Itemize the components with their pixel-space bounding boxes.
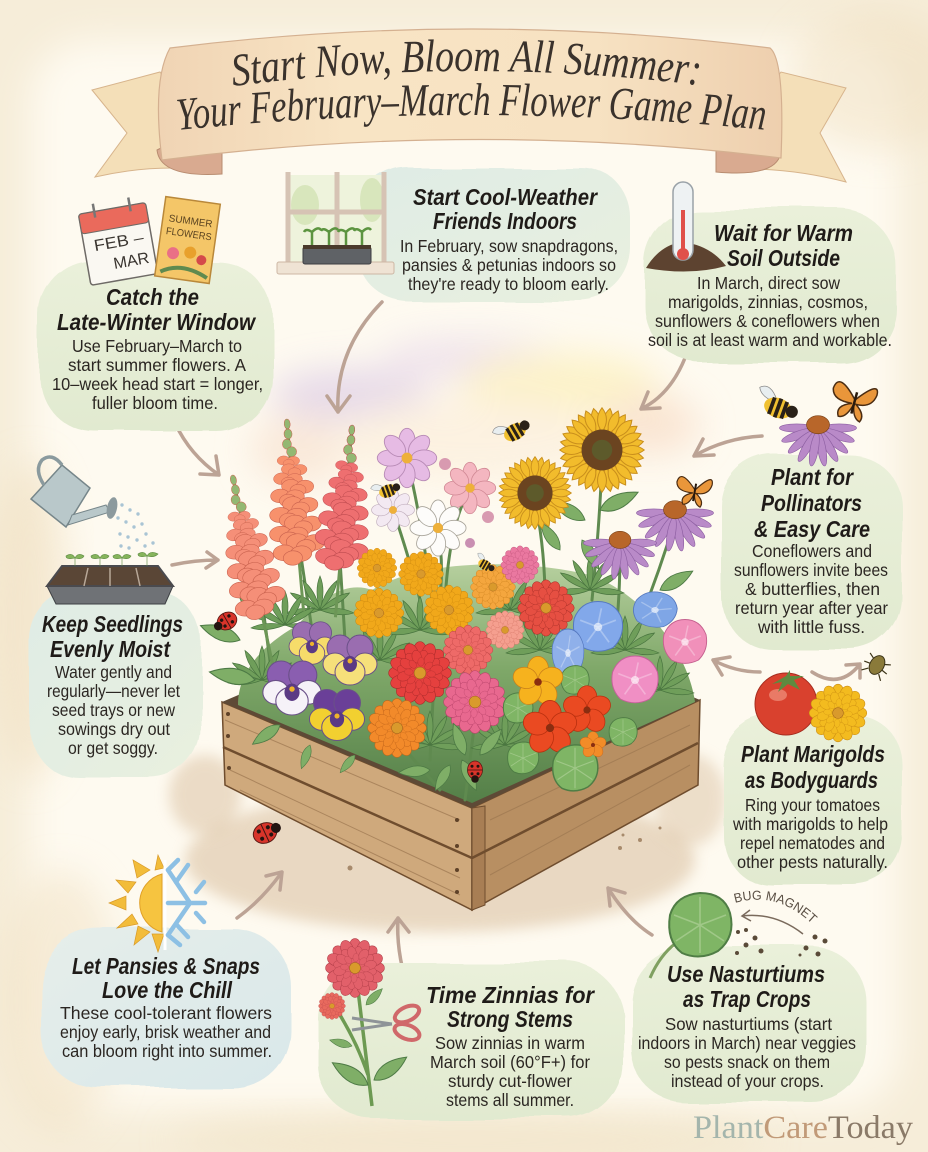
- heading: as Trap Crops: [683, 986, 811, 1012]
- arrow: pansies: [237, 872, 282, 918]
- body text: [52, 336, 263, 413]
- body text: These cool-tolerant flowers: [60, 1003, 272, 1023]
- body text: instead of your crops.: [671, 1071, 824, 1091]
- panel: keep seedlings evenly moist: [30, 590, 200, 778]
- heading: [714, 220, 853, 271]
- body text: indoors in March) near veggies: [638, 1033, 856, 1053]
- arrow: marigolds: [713, 657, 760, 675]
- icon: calendar: [77, 195, 158, 285]
- panel: use nasturtiums as trap crops: [630, 947, 866, 1102]
- body text: seed trays or new: [52, 700, 175, 720]
- banner right tail: [716, 72, 846, 182]
- panel: plant marigolds as bodyguards: [722, 715, 903, 885]
- heading: Plant for: [771, 464, 854, 490]
- title line one: [233, 39, 700, 86]
- body text: sturdy cut-flower: [448, 1071, 572, 1091]
- body text: [60, 1003, 272, 1061]
- marigolds: [333, 531, 495, 659]
- heading: [42, 611, 183, 662]
- nasturtiums and round leaves: [503, 656, 637, 791]
- bee near cosmos: [370, 477, 402, 502]
- sky wash behind garden: [250, 338, 700, 485]
- heading: [57, 284, 257, 335]
- raised garden bed and flowers: [198, 358, 714, 910]
- body text: pansies & petunias indoors so: [402, 255, 616, 275]
- panel: let pansies and snaps love the chill: [40, 928, 290, 1088]
- heading: [741, 741, 885, 793]
- sunflowers: [456, 358, 694, 572]
- icon: bug: [860, 650, 893, 682]
- body text: Coneflowers and: [752, 541, 872, 561]
- body text: Sow nasturtiums (start: [665, 1014, 832, 1034]
- body text: stems all summer.: [446, 1090, 574, 1110]
- morning glories: [552, 588, 707, 703]
- banner main band: [158, 29, 782, 160]
- body text: with little fuss.: [757, 617, 865, 637]
- heading: [754, 464, 870, 542]
- icon: cut zinnia with scissors: [301, 914, 422, 1106]
- foliage leaf clusters: [228, 556, 694, 751]
- arrow: warm soil: [641, 358, 685, 409]
- pansies: [263, 622, 377, 740]
- body text: so pests snack on them: [664, 1052, 830, 1072]
- icon: calendar: MAR: [112, 250, 151, 273]
- back foliage mass: [238, 564, 695, 803]
- heading: Catch the: [106, 284, 199, 310]
- arrow: nasturtiums: [608, 888, 652, 935]
- body text: other pests naturally.: [737, 852, 888, 872]
- icon: seed packet: [155, 197, 220, 284]
- icon: half sun half snowflake: [109, 855, 205, 952]
- panel: catch the late-winter window: [40, 262, 272, 432]
- icon: thermometer in soil: [646, 182, 726, 272]
- heading: Love the Chill: [102, 977, 233, 1003]
- body text: [430, 1033, 590, 1110]
- bee top: [491, 412, 533, 449]
- icon: window with seedlings: [277, 172, 394, 274]
- label: bug magnet: BUG MAGNET: [734, 890, 818, 922]
- icon: watering can: [31, 457, 155, 550]
- body text: & butterflies, then: [745, 579, 880, 599]
- coneflowers: [583, 501, 714, 580]
- body text: [638, 1014, 856, 1091]
- heading: Friends Indoors: [433, 208, 577, 234]
- icon: tomato and marigold: [755, 660, 891, 766]
- body text: fuller bloom time.: [92, 393, 218, 413]
- body text: Sow zinnias in warm: [435, 1033, 585, 1053]
- panel: wait for warm soil outside: [645, 210, 895, 362]
- body text: Use February–March to: [72, 336, 242, 356]
- bee on marigold: [472, 552, 498, 574]
- body text: enjoy early, brisk weather and: [60, 1022, 271, 1042]
- icon: nasturtium leaf with bugs: [650, 893, 828, 978]
- arrow: tomato to bug: [812, 664, 860, 679]
- title line two: Your February–March Flower Game Plan: [177, 83, 765, 130]
- heading: Plant Marigolds: [741, 741, 885, 767]
- heading: Evenly Moist: [50, 636, 171, 662]
- body text: [648, 273, 892, 350]
- body text: or get soggy.: [68, 738, 158, 758]
- body text: sunflowers & coneflowers when: [655, 311, 880, 331]
- arrow: zinnias: [388, 918, 409, 985]
- banner left tail: [92, 72, 222, 177]
- ladybug on leaves: [468, 761, 482, 783]
- icon: bee, butterfly and coneflower: [752, 378, 878, 467]
- heading: Time Zinnias for: [426, 982, 595, 1008]
- body text: regularly—never let: [47, 681, 180, 701]
- heading: Let Pansies & Snaps: [72, 953, 260, 979]
- body text: March soil (60°F+) for: [430, 1052, 590, 1072]
- title line one: Start Now, Bloom All Summer:: [233, 39, 700, 86]
- body text: return year after year: [735, 598, 888, 618]
- cosmos: [372, 428, 496, 556]
- body text: [734, 541, 888, 637]
- heading: Keep Seedlings: [42, 611, 183, 637]
- icon: calendar: FEB –: [93, 230, 145, 255]
- body text: In March, direct sow: [697, 273, 840, 293]
- heading: & Easy Care: [754, 516, 870, 542]
- snapdragons: [206, 417, 379, 670]
- body text: soil is at least warm and workable.: [648, 330, 892, 350]
- arrow: late winter: [175, 423, 219, 475]
- body text: [400, 236, 618, 294]
- body text: In February, sow snapdragons,: [400, 236, 618, 256]
- heading: [426, 982, 595, 1032]
- body text: sunflowers invite bees: [734, 560, 888, 580]
- heading: [72, 953, 260, 1003]
- arrow: start indoors: [327, 302, 382, 412]
- wooden raised bed: [222, 600, 700, 910]
- body text: can bloom right into summer.: [62, 1041, 272, 1061]
- panel: start cool-weather friends indoors: [357, 168, 633, 302]
- heading: Strong Stems: [447, 1006, 573, 1032]
- zinnias: [343, 530, 598, 782]
- body text: marigolds, zinnias, cosmos,: [668, 292, 868, 312]
- icon: seed packet: FLOWERS: [165, 226, 213, 243]
- heading: Soil Outside: [727, 245, 840, 271]
- heading: [413, 184, 598, 234]
- body text: they're ready to bloom early.: [408, 274, 609, 294]
- stems: [262, 460, 675, 800]
- heading: Wait for Warm: [714, 220, 853, 246]
- insects around garden: [210, 412, 713, 847]
- body text: with marigolds to help: [732, 814, 888, 834]
- logo: PlantCareToday: [693, 1110, 914, 1146]
- heading: Use Nasturtiums: [667, 961, 825, 987]
- title banner: [91, 28, 847, 183]
- heading: Pollinators: [761, 490, 862, 516]
- butterfly on coneflower: [673, 474, 713, 509]
- panel: plant for pollinators: [722, 455, 902, 650]
- body text: [47, 662, 180, 758]
- body text: Water gently and: [55, 662, 172, 682]
- upper leaves: [198, 486, 696, 688]
- title line two: [177, 83, 765, 130]
- ground wash under box: [169, 754, 726, 932]
- body text: sowings dry out: [58, 719, 170, 739]
- panel: time zinnias for strong stems: [317, 963, 622, 1118]
- heading: as Bodyguards: [745, 767, 878, 793]
- heading: Late-Winter Window: [57, 309, 257, 335]
- body text: repel nematodes and: [740, 833, 885, 853]
- ladybug left: [210, 609, 240, 636]
- icon: seedling tray: [47, 552, 173, 604]
- body text: start summer flowers. A: [68, 355, 246, 375]
- arrows to garden: [172, 302, 860, 985]
- heading: Start Cool-Weather: [413, 184, 598, 210]
- arrow: pollinators: [694, 436, 762, 456]
- front leaves: [249, 720, 506, 793]
- body text: 10–week head start = longer,: [52, 374, 263, 394]
- arrow: seedlings: [172, 552, 218, 568]
- ladybug ground: [250, 817, 285, 847]
- body text: Ring your tomatoes: [745, 795, 880, 815]
- heading: [667, 961, 825, 1012]
- icon: seed packet: SUMMER: [168, 213, 213, 230]
- body text: [732, 795, 888, 872]
